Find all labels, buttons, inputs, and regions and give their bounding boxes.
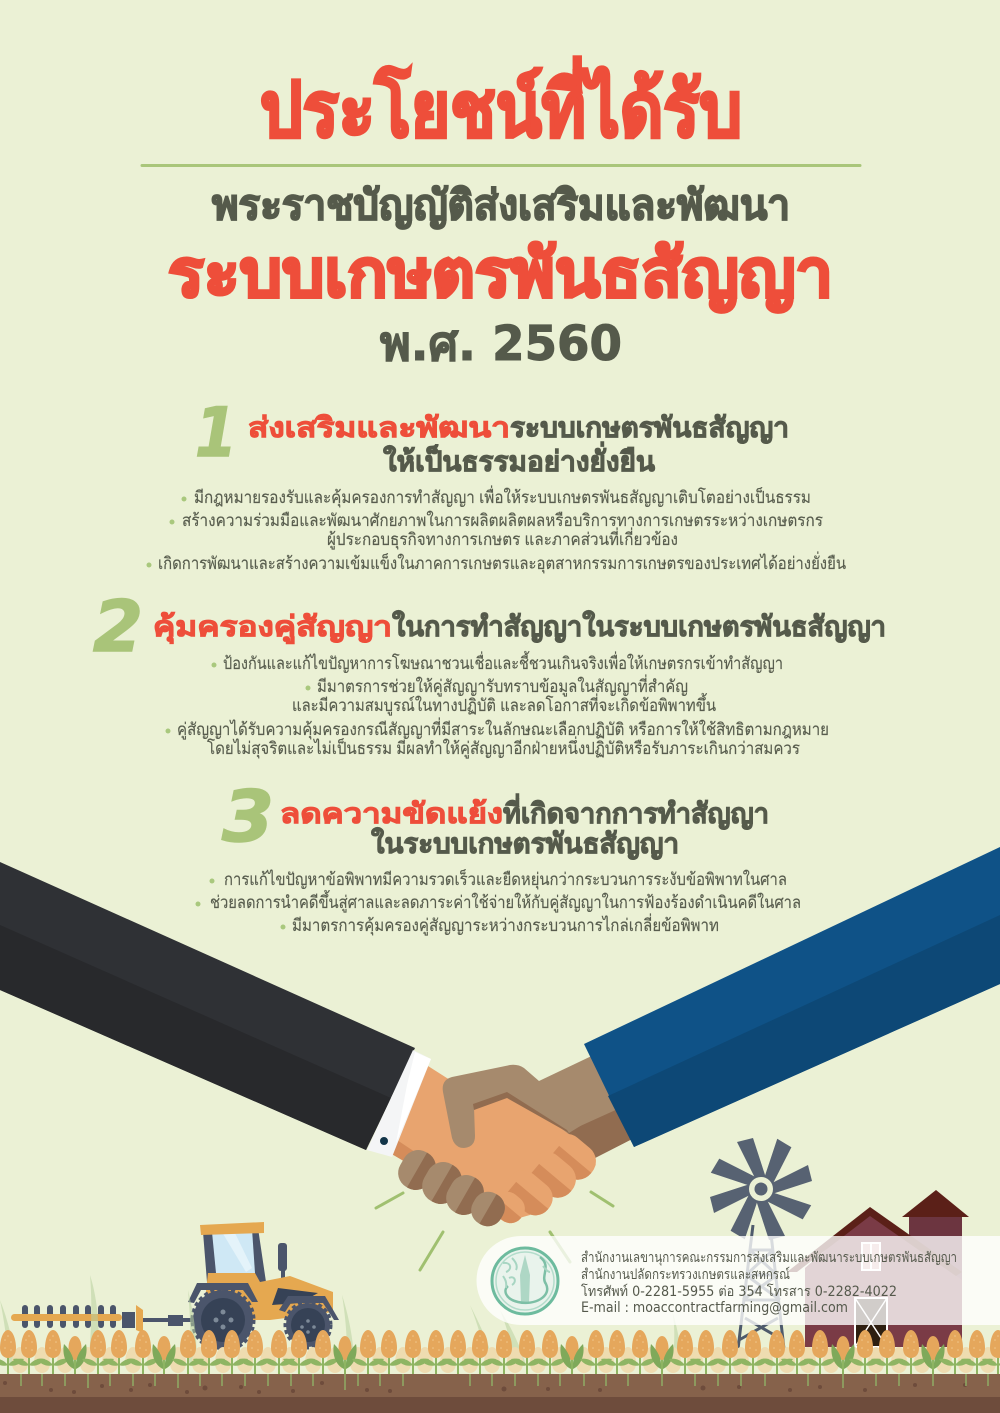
dark thumb shadow xyxy=(473,1092,569,1133)
pale background corn row xyxy=(12,1347,996,1373)
barn xyxy=(787,1190,969,1347)
barn window xyxy=(862,1243,880,1270)
corn row xyxy=(0,1330,1000,1375)
windmill xyxy=(708,1136,814,1349)
section 2 heading: ในการทำสัญญาในระบบเกษตรพันธสัญญา xyxy=(392,610,886,643)
section 3 bullets xyxy=(196,868,801,936)
windmill blades xyxy=(708,1136,814,1242)
tractor big wheel xyxy=(192,1289,254,1351)
contact text: โทรศัพท์ 0-2281-5955 ต่อ 354 โทรสาร 0-2282-4022 xyxy=(581,1283,897,1300)
windmill tower xyxy=(738,1225,784,1349)
blue suit sleeve xyxy=(584,847,1000,1147)
section 1 bullets: เกิดการพัฒนาและสร้างความเข้มแข็งในภาคการเกษตรและอุตสาหกรรมการเกษตรของประเทศได้อย่างยั่งยืน xyxy=(158,551,846,574)
section 2 heading: คุ้มครองคู่สัญญา xyxy=(153,611,392,644)
background grass xyxy=(0,1275,681,1365)
section 1 heading xyxy=(248,412,789,477)
section 3 heading xyxy=(280,793,769,860)
number 1: 1 xyxy=(195,394,237,473)
section 3 heading: ที่เกิดจากการทำสัญญา xyxy=(503,793,769,830)
section 1 heading: ระบบเกษตรพันธสัญญา xyxy=(510,412,789,444)
white shirt cuff xyxy=(367,1050,431,1157)
section 2 bullets: และมีความสมบูรณ์ในทางปฏิบัติ และลดโอกาสที่จะเกิดข้อพิพาทขึ้น xyxy=(292,693,716,716)
subtitle: contract farming system: ระบบเกษตรพันธสัญญา xyxy=(168,236,833,312)
number 2: 2 xyxy=(93,586,143,668)
orange fingers xyxy=(488,1127,603,1228)
tractor xyxy=(11,1222,339,1351)
tractor body xyxy=(205,1273,333,1320)
number 3: 3 xyxy=(222,776,274,858)
section 3 bullets: การแก้ไขปัญหาข้อพิพาทมีความรวดเร็วและยืดหยุ่นกว่ากระบวนการระงับข้อพิพาทในศาล xyxy=(224,868,787,890)
section 1 bullets: มีกฎหมายรองรับและคุ้มครองการทำสัญญา เพื่อให้ระบบเกษตรพันธสัญญาเติบโตอย่างเป็นธรรม xyxy=(194,485,811,508)
black suit sleeve xyxy=(0,862,415,1150)
section 2 heading xyxy=(153,610,886,644)
subtitle: act name: พระราชบัญญัติส่งเสริมและพัฒนา xyxy=(212,182,790,229)
tractor exhaust xyxy=(278,1243,287,1278)
section 3 bullets: ช่วยลดการนำคดีขึ้นสู่ศาลและลดภาระค่าใช้จ่ายให้กับคู่สัญญาในการฟ้องร้องดำเนินคดีในศาล xyxy=(210,890,801,913)
section 1 bullets: ผู้ประกอบธุรกิจทางการเกษตร และภาคส่วนที่เกี่ยวข้อง xyxy=(327,527,678,550)
tractor harrow xyxy=(11,1305,193,1333)
section 1 bullets: สร้างความร่วมมือและพัฒนาศักยภาพในการผลิตผลิตผลหรือบริการทางการเกษตรระหว่างเกษตรกร xyxy=(182,510,823,530)
section 1 heading: ให้เป็นธรรมอย่างยั่งยืน xyxy=(383,441,655,477)
orange hand xyxy=(390,1066,596,1222)
section 2 xyxy=(93,586,886,759)
section 3 heading: ลดความขัดแย้ง xyxy=(280,798,503,829)
section 2 bullets: โดยไม่สุจริตและไม่เป็นธรรม มีผลทำให้คู่สัญญาอีกฝ่ายหนึ่งปฏิบัติหรือรับภาระเกินกว่าสมควร xyxy=(207,736,800,759)
section 2 bullets: ป้องกันและแก้ไขปัญหาการโฆษณาชวนเชื่อและชี้ชวนเกินจริงเพื่อให้เกษตรกรเข้าทำสัญญา xyxy=(223,651,783,673)
sparkle lines xyxy=(376,1192,613,1270)
barn silo xyxy=(902,1190,969,1347)
logo: ministry seal xyxy=(492,1248,558,1314)
section 3 xyxy=(196,776,801,936)
section 1 heading: ส่งเสริมและพัฒนา xyxy=(248,412,510,443)
title divider xyxy=(142,164,860,167)
soil xyxy=(0,1374,1000,1413)
contact text xyxy=(581,1250,957,1316)
title: ประโยชน์ที่ได้รับ xyxy=(260,56,742,153)
section 1 bullets xyxy=(146,485,846,574)
tractor fenders xyxy=(188,1283,339,1320)
section 2 bullets xyxy=(166,651,829,759)
section 1 xyxy=(146,394,846,574)
contact text: สำนักงานปลัดกระทรวงเกษตรและสหกรณ์ xyxy=(581,1266,790,1283)
tractor vent xyxy=(272,1288,318,1305)
barn roof xyxy=(787,1207,962,1276)
windmill hub xyxy=(749,1177,773,1201)
barn door xyxy=(855,1298,887,1347)
section 2 bullets: คู่สัญญาได้รับความคุ้มครองกรณีสัญญาที่มีสาระในลักษณะเลือกปฏิบัติ หรือการให้ใช้สิทธิตามกฎหมาย xyxy=(177,717,829,740)
section 3 heading: ในระบบเกษตรพันธสัญญา xyxy=(371,827,679,860)
contact panel xyxy=(477,1236,1000,1325)
contact panel background xyxy=(477,1236,1000,1325)
subtitle: year: พ.ศ. 2560 xyxy=(380,316,622,372)
dark hand arm xyxy=(510,1052,640,1158)
dark fingers xyxy=(392,1144,510,1232)
section 2 bullets: มีมาตรการช่วยให้คู่สัญญารับทราบข้อมูลในสัญญาที่สำคัญ xyxy=(317,674,688,697)
tractor small wheel xyxy=(285,1302,331,1348)
handshake illustration xyxy=(0,847,1000,1270)
tractor cab xyxy=(200,1222,266,1282)
contact text: E-mail : moaccontractfarming@gmail.com xyxy=(581,1300,848,1316)
section 3 bullets: มีมาตรการคุ้มครองคู่สัญญาระหว่างกระบวนการไกล่เกลี่ยข้อพิพาท xyxy=(292,913,719,936)
barn wall xyxy=(805,1211,962,1347)
dark thumb xyxy=(443,1065,590,1148)
